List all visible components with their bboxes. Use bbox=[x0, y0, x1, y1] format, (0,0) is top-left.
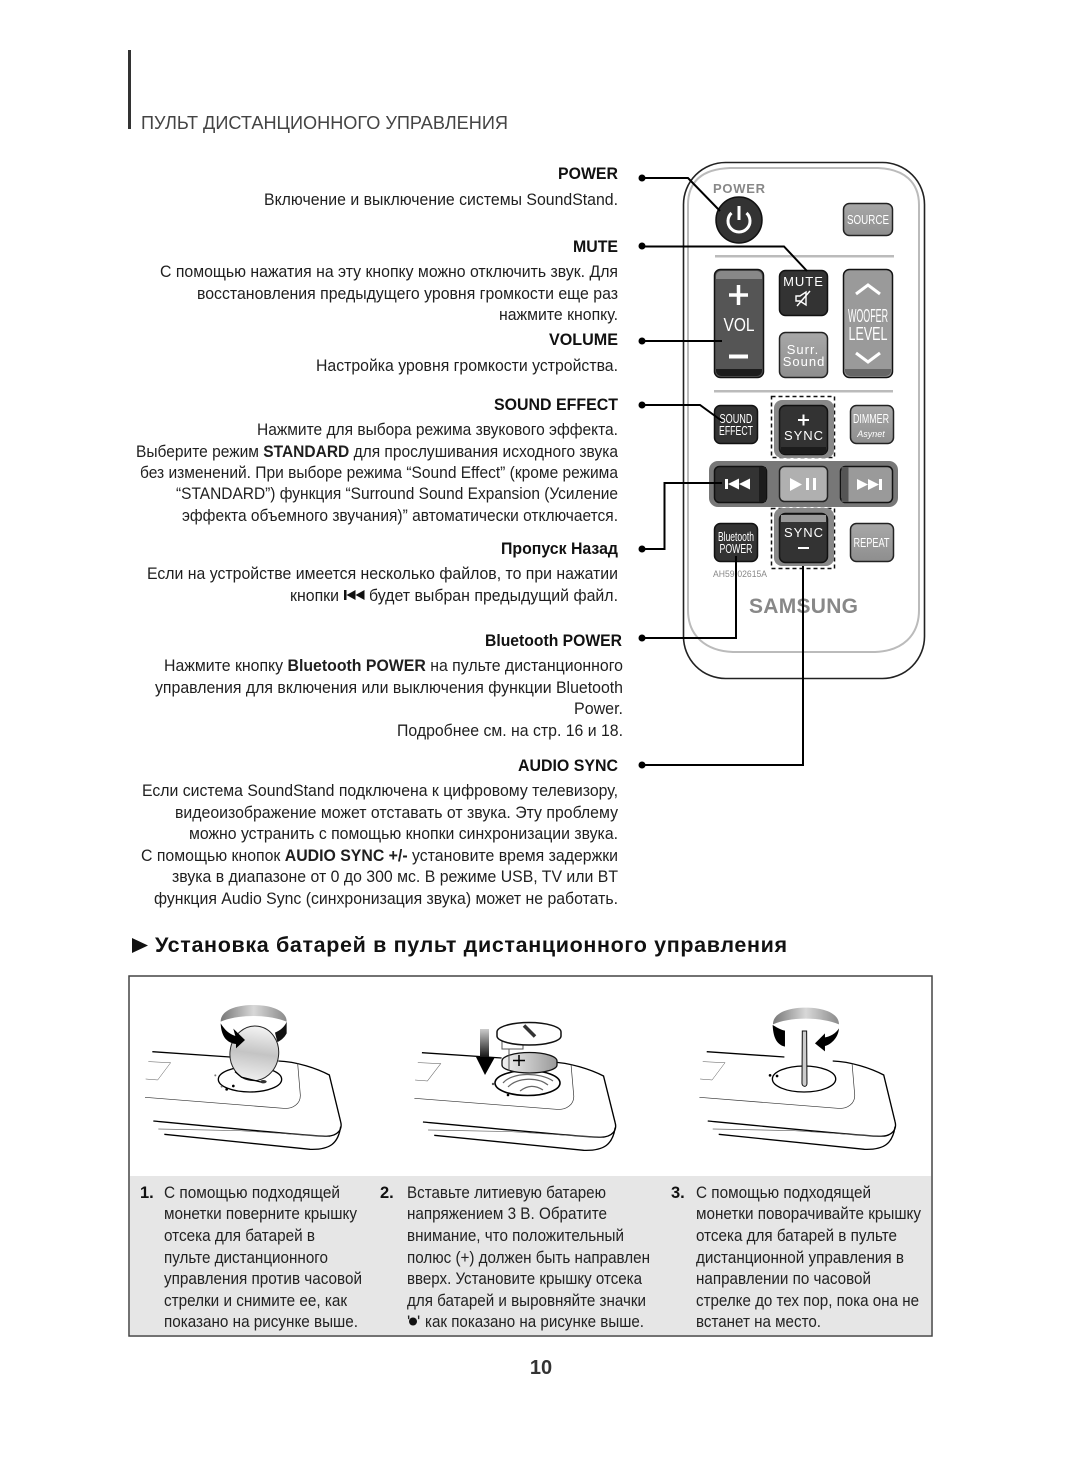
audio sync minus button bbox=[772, 508, 834, 568]
function: volume bbox=[316, 331, 618, 375]
sound effect button: EFFECT bbox=[719, 423, 753, 438]
sound effect button bbox=[714, 406, 758, 444]
step 1 caption: отсека для батарей в bbox=[164, 1226, 315, 1245]
function: power: POWER bbox=[558, 165, 618, 183]
leader lines bbox=[638, 174, 807, 768]
repeat button: REPEAT bbox=[854, 535, 890, 550]
step 3 caption: дистанционной управления в bbox=[696, 1248, 904, 1267]
illustration: step 2 insert battery bbox=[414, 1053, 616, 1150]
remote control illustration bbox=[684, 162, 924, 678]
function: bluetooth power: Подробнее см. на стр. 16 и 18. bbox=[397, 721, 623, 740]
section title: ПУЛЬТ ДИСТАНЦИОННОГО УПРАВЛЕНИЯ bbox=[141, 112, 508, 133]
surround sound button: Sound bbox=[783, 354, 825, 369]
dimmer button: Asynet bbox=[856, 429, 885, 439]
step 2 caption: вверх. Установите крышку отсека bbox=[407, 1269, 642, 1288]
mute button bbox=[780, 270, 828, 316]
function: sound effect: SOUND EFFECT bbox=[494, 396, 618, 414]
step 2 caption: как показано на рисунке выше. bbox=[425, 1312, 644, 1331]
remote body bbox=[684, 162, 924, 678]
step 1 caption: стрелки и снимите ее, как bbox=[164, 1291, 348, 1310]
text block: remote control functions bbox=[136, 165, 623, 908]
step 2 caption: Вставьте литиевую батарею bbox=[407, 1183, 606, 1202]
function: skip back: Если на устройстве имеется несколько файлов, то при нажатии bbox=[147, 564, 618, 583]
function: volume: Настройка уровня громкости устройства. bbox=[316, 356, 618, 375]
step 3 caption: отсека для батарей в пульте bbox=[696, 1226, 897, 1245]
dimmer button bbox=[850, 406, 894, 444]
rotate arrow and coin edge bbox=[773, 1008, 839, 1086]
panel: battery installation steps bbox=[129, 976, 932, 1336]
step 2 caption: полюс (+) должен быть направлен bbox=[407, 1248, 650, 1267]
step captions background bbox=[130, 1176, 931, 1335]
function: audio sync: звука в диапазоне от 0 до 300 мс. В режиме USB, TV или BT bbox=[172, 867, 618, 886]
battery and cover bbox=[497, 1022, 561, 1073]
power label: POWER bbox=[713, 181, 766, 196]
step 3 caption: встанет на место. bbox=[696, 1312, 821, 1331]
step 2 caption: напряжением 3 В. Обратите bbox=[407, 1204, 607, 1223]
playback controls bbox=[709, 461, 898, 507]
repeat button bbox=[850, 524, 894, 562]
illustration: step 1 open cover bbox=[145, 1005, 341, 1149]
step 3 caption: монетки поворачивайте крышку bbox=[696, 1204, 921, 1223]
step 1 caption bbox=[140, 1183, 362, 1331]
step 3 caption bbox=[671, 1183, 921, 1331]
woofer level button bbox=[844, 270, 892, 378]
function: sound effect: “STANDARD”) функция “Surround Sound Expansion (Усиление bbox=[176, 484, 618, 503]
function: power bbox=[264, 165, 618, 209]
step 3 caption: стрелке до тех пор, пока она не bbox=[696, 1291, 919, 1310]
function: skip back bbox=[147, 540, 618, 605]
dimmer button: DIMMER bbox=[853, 411, 889, 426]
illustration: step 3 close cover bbox=[699, 1052, 896, 1149]
function: mute: нажмите кнопку. bbox=[499, 305, 618, 324]
volume button: VOL bbox=[724, 315, 754, 335]
step 1 caption: монетки поверните крышку bbox=[164, 1204, 357, 1223]
step 3 caption: 3. bbox=[671, 1184, 685, 1202]
function: bluetooth power: Bluetooth POWER bbox=[485, 632, 622, 650]
step 1 caption: управления против часовой bbox=[164, 1269, 362, 1288]
function: bluetooth power: управления для включения или выключения функции Bluetooth bbox=[155, 678, 623, 697]
function: mute: восстановления предыдущего уровня громкости еще раз bbox=[197, 284, 618, 303]
audio sync plus button bbox=[772, 396, 834, 458]
source button: SOURCE bbox=[847, 212, 889, 227]
function: sound effect: эффекта объемного звучания)” автоматически отключается. bbox=[182, 506, 618, 525]
audio sync plus button: SYNC bbox=[784, 428, 824, 443]
step 3 caption: С помощью подходящей bbox=[696, 1183, 871, 1202]
woofer level button: WOOFER bbox=[848, 306, 888, 326]
model number: AH59-02615A bbox=[713, 569, 767, 579]
audio sync minus button: SYNC bbox=[784, 525, 824, 540]
mute button: MUTE bbox=[783, 274, 824, 289]
step 1 caption: показано на рисунке выше. bbox=[164, 1312, 358, 1331]
samsung logo: SAMSUNG bbox=[749, 595, 858, 618]
function: audio sync: Если система SoundStand подключена к цифровому телевизору, bbox=[142, 781, 618, 800]
step 2 caption: для батарей и выровняйте значки bbox=[407, 1291, 646, 1310]
function: sound effect: Нажмите для выбора режима звукового эффекта. bbox=[257, 420, 618, 439]
function: sound effect: Выберите режим STANDARD для прослушивания исходного звука bbox=[136, 442, 618, 461]
function: skip back: кнопки bbox=[290, 586, 339, 605]
function: power: Включение и выключение системы SoundStand. bbox=[264, 190, 618, 209]
function: audio sync: С помощью кнопок AUDIO SYNC +/- установите время задержки bbox=[141, 846, 618, 865]
step 3 caption: направлении по часовой bbox=[696, 1269, 871, 1288]
page header accent bar bbox=[128, 50, 131, 129]
function: audio sync: можно устранить с помощью кнопки синхронизации звука. bbox=[189, 824, 618, 843]
step 2 caption: ' bbox=[407, 1312, 410, 1331]
function: audio sync bbox=[141, 757, 618, 908]
function: audio sync: AUDIO SYNC bbox=[518, 757, 618, 775]
function: mute bbox=[160, 238, 618, 324]
function: bluetooth power: Нажмите кнопку Bluetooth POWER на пульте дистанционного bbox=[164, 656, 623, 675]
volume button bbox=[714, 270, 764, 378]
function: sound effect bbox=[136, 396, 618, 525]
bluetooth power button: Bluetooth bbox=[718, 529, 754, 544]
function: sound effect: без изменений. При выборе режима “Sound Effect” (кроме режима bbox=[140, 463, 618, 482]
function: bluetooth power: Power. bbox=[574, 699, 623, 718]
arrow: insert direction bbox=[476, 1029, 495, 1075]
step 2 caption: 2. bbox=[380, 1184, 394, 1202]
bluetooth power button: POWER bbox=[720, 541, 752, 556]
step 1 caption: С помощью подходящей bbox=[164, 1183, 340, 1202]
surround sound button: Surr. bbox=[787, 342, 819, 357]
step 2 caption: ' bbox=[417, 1312, 420, 1331]
step 1 caption: 1. bbox=[140, 1184, 154, 1202]
step 2 caption bbox=[380, 1183, 650, 1331]
source button bbox=[844, 204, 892, 236]
function: bluetooth power bbox=[155, 632, 623, 740]
step 2 caption: внимание, что положительный bbox=[407, 1226, 624, 1245]
woofer level button: LEVEL bbox=[848, 324, 888, 344]
function: mute: С помощью нажатия на эту кнопку можно отключить звук. Для bbox=[160, 262, 618, 281]
bluetooth power button bbox=[714, 524, 758, 562]
function: volume: VOLUME bbox=[549, 331, 618, 349]
step 1 caption: пульте дистанционного bbox=[164, 1248, 328, 1267]
surround sound button bbox=[780, 332, 828, 378]
function: skip back: Пропуск Назад bbox=[501, 540, 618, 558]
battery compartment bbox=[492, 1070, 560, 1096]
function: audio sync: видеоизображение может отставать от звука. Эту проблему bbox=[175, 803, 618, 822]
power button bbox=[716, 197, 762, 243]
function: audio sync: функция Audio Sync (синхронизация звука) может не работать. bbox=[154, 889, 618, 908]
function: mute: MUTE bbox=[573, 238, 618, 256]
page number: 10 bbox=[530, 1357, 552, 1379]
function: skip back: будет выбран предыдущий файл. bbox=[369, 586, 618, 605]
sound effect button: SOUND bbox=[720, 411, 752, 426]
heading: battery installation: Установка батарей в пульт дистанционного управления bbox=[155, 933, 787, 957]
